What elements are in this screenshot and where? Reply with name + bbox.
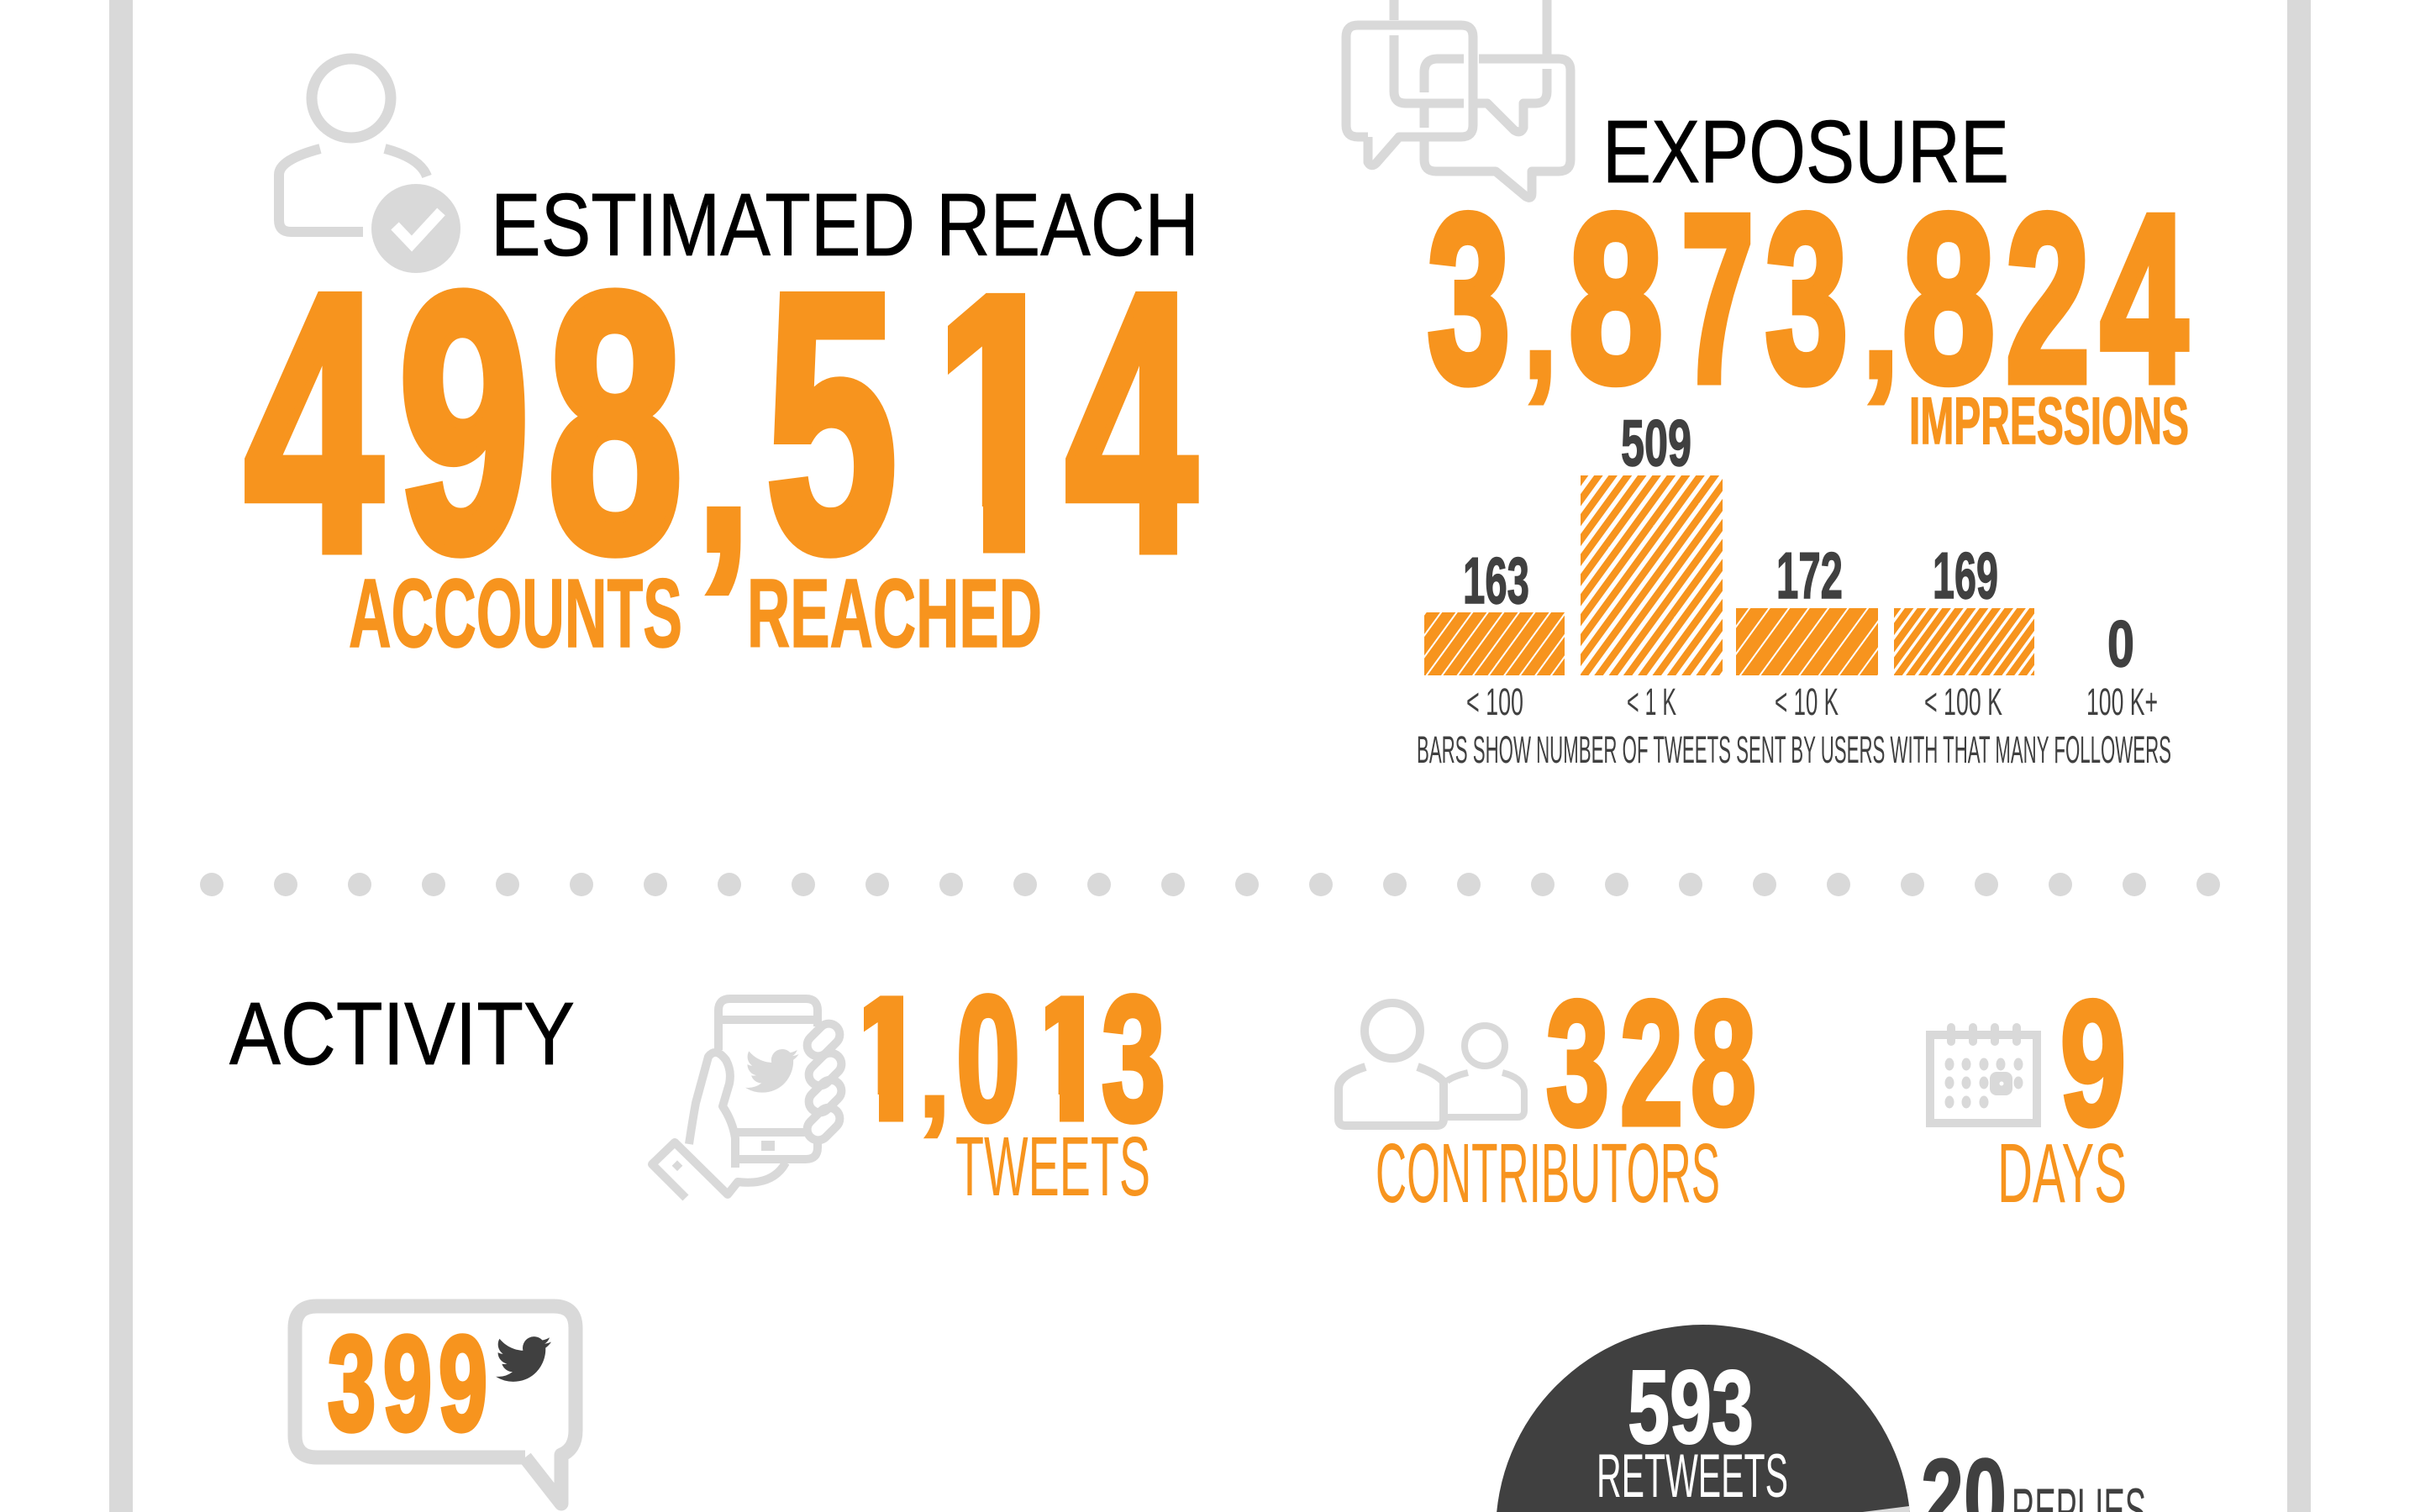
number: 498,514: 4 — [245, 217, 384, 627]
panel: tweet types — [295, 1306, 2146, 1512]
stat: days: DAYS — [1997, 1126, 2127, 1221]
number: 3,873,824: 2 — [2006, 165, 2090, 431]
number: 3,873,824: 3 — [1428, 165, 1510, 431]
axis labels: < 100 K — [1924, 680, 2002, 723]
stat: tweets: 1 — [1023, 959, 1113, 1158]
axis labels: 100 K+ — [2086, 680, 2158, 723]
stat: tweets: TWEETS — [955, 1120, 1150, 1214]
stat: tweets — [864, 993, 1163, 1196]
label: impressions: IMPRESSIONS — [1909, 383, 2189, 458]
panel: estimated reach — [245, 59, 1199, 668]
bar: under 1K: 509 — [1621, 406, 1691, 480]
icon: calendar — [1930, 1023, 2037, 1123]
label: accounts reached: ACCOUNTS — [349, 559, 682, 668]
label: 593 retweets: 593 — [1628, 1350, 1754, 1466]
axis labels: < 100 — [1466, 680, 1523, 723]
bar: under 100K: 169 — [1933, 538, 1998, 612]
speech bubble: original tweets — [295, 1306, 576, 1504]
number: 498,514: 1 — [920, 217, 1075, 627]
number: 399 — [328, 1308, 487, 1458]
axis labels — [1466, 680, 2158, 723]
stat: contributors — [1376, 964, 1756, 1221]
bar: 100K plus: 0 — [2107, 606, 2134, 680]
stat: contributors: CONTRIBUTORS — [1376, 1126, 1720, 1221]
stat: days: 9 — [2060, 964, 2126, 1162]
number: 3,873,824: 8 — [1569, 165, 1663, 431]
stat: contributors: 3 — [1546, 964, 1609, 1162]
number: 498,514: 5 — [765, 217, 897, 627]
number: 3,873,824: 7 — [1681, 165, 1754, 431]
label: 20 replies — [1921, 1437, 2146, 1512]
axis labels: < 1 K — [1627, 680, 1676, 723]
bar: under 10K: 172 — [1776, 538, 1843, 612]
number: 3,873,824: 3 — [1765, 165, 1848, 431]
number: 3,873,824: 4 — [2101, 165, 2188, 431]
stat: days — [1997, 964, 2127, 1221]
bar: under 100 — [1424, 543, 1565, 675]
number: 498,514: 4 — [1065, 217, 1198, 627]
panel: exposure — [1346, 0, 2189, 771]
stat: contributors: 2 — [1620, 964, 1683, 1162]
icon: verified user — [279, 59, 460, 273]
icon: twitter bird — [496, 1336, 551, 1382]
bar chart: tweets by follower count — [1417, 406, 2171, 771]
heading: estimated reach: ESTIMATED REACH — [491, 176, 1199, 275]
icon: contributors — [1339, 1003, 1524, 1126]
number: 3,873,824 — [1428, 165, 2188, 431]
bar: under 10K — [1736, 538, 1878, 675]
axis labels: < 10 K — [1775, 680, 1839, 723]
number: 3,873,824: 8 — [1902, 165, 1995, 431]
number: 3,873,824: , — [1523, 226, 1558, 413]
number: 399: 3 — [328, 1308, 376, 1458]
number: 498,514 — [245, 287, 1199, 596]
dotted divider — [200, 873, 2220, 896]
label: accounts reached: REACHED — [747, 559, 1042, 668]
bar: under 1K — [1581, 406, 1723, 675]
number: 399: 9 — [383, 1308, 432, 1458]
pie chart: retweets and replies — [1496, 1325, 1911, 1512]
stat: tweets: 1 — [842, 959, 932, 1158]
icon: chat bubbles — [1346, 0, 1570, 197]
icon: hand holding phone — [652, 999, 846, 1198]
heading: activity: ACTIVITY — [229, 984, 575, 1084]
stat: contributors: 8 — [1691, 964, 1756, 1162]
bar: under 100K — [1894, 538, 2034, 675]
stat: tweets: 3 — [1102, 959, 1165, 1158]
label: 593 retweets — [1597, 1350, 1788, 1510]
bar: under 100: 163 — [1463, 543, 1529, 617]
heading: exposure: EXPOSURE — [1602, 102, 2009, 202]
number: 498,514: 9 — [398, 217, 530, 627]
number: 498,514: , — [694, 299, 753, 609]
number: 3,873,824: , — [1861, 226, 1900, 413]
panel: activity — [229, 993, 2124, 1203]
number: 498,514: 8 — [547, 217, 683, 627]
number: 399: 9 — [439, 1308, 487, 1458]
stat: tweets: 0 — [956, 959, 1020, 1158]
label: 593 retweets: RETWEETS — [1597, 1442, 1788, 1510]
stat: tweets: , — [918, 995, 951, 1145]
